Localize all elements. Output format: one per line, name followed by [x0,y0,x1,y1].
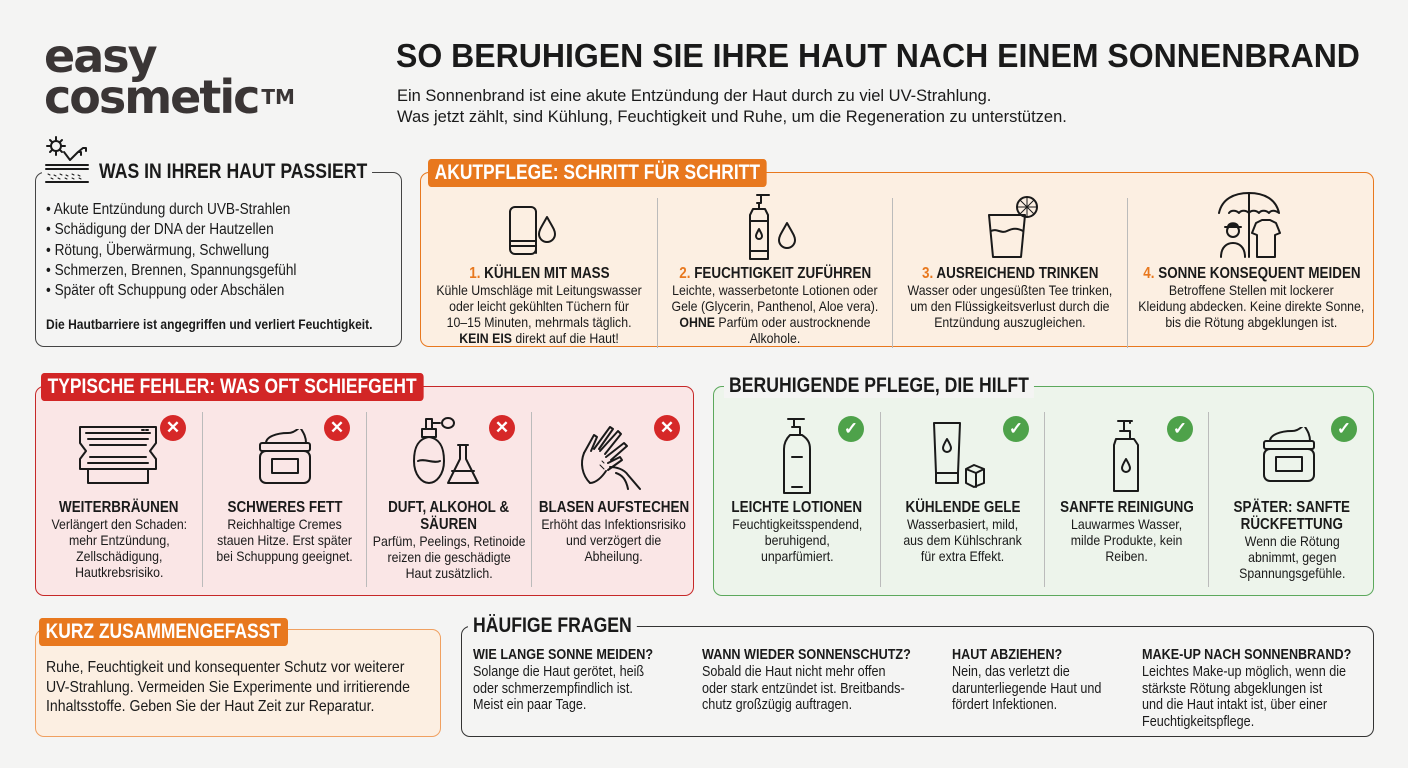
error 2 [216,499,353,564]
icon: umbrella person shirt [1218,192,1281,258]
product 2: aus dem Kühlschrank [903,532,1022,548]
step 3: Entzündung auszugleichen. [934,314,1086,330]
product 3: SANFTE REINIGUNG [1060,499,1193,516]
check mark [1003,416,1029,442]
summary text: Inhaltsstoffe. Geben Sie der Haut Zeit zur Reparatur. [46,698,374,715]
heading: BERUHIGENDE PFLEGE, DIE HILFT [729,374,1029,397]
bullet list: • Später oft Schuppung oder Abschälen [46,282,284,299]
summary text: Ruhe, Feuchtigkeit und konsequenter Schutz vor weiterer [46,659,404,676]
subtitle: Was jetzt zählt, sind Kühlung, Feuchtigkeit und Ruhe, um die Regeneration zu unterstützen. [397,108,1067,126]
error 2: stauen Hitze. Erst später [217,532,352,548]
icon: lotion bottle [783,418,811,494]
logo: easy [44,29,156,83]
icon: pump soap [1113,420,1139,492]
error 1 [51,498,187,580]
error 2: bei Schuppung geeignet. [216,548,353,564]
product 2 [903,498,1022,564]
error 4: und verzögert die [566,532,661,548]
product 4 [1234,498,1350,581]
error 4: Erhöht das Infektionsrisiko [541,516,686,532]
error 2: SCHWERES FETT [227,499,342,516]
faq 1: Meist ein paar Tage. [473,697,586,713]
tab: TYPISCHE FEHLER: WAS OFT SCHIEFGEHT [48,375,417,398]
product 4: RÜCKFETTUNG [1241,516,1343,533]
subtitle [397,87,1067,126]
icon: glass with lemon [988,196,1038,258]
heading: HÄUFIGE FRAGEN [473,614,632,637]
icon: gel tube & ice [933,422,985,488]
x mark [654,415,680,441]
step 2: 2. FEUCHTIGKEIT ZUFÜHREN [679,265,871,282]
step 1: oder leicht gekühlten Tüchern für [449,298,629,314]
faq 2: oder stark entzündet ist. Breitbands- [702,680,905,696]
step 1: Kühle Umschläge mit Leitungswasser [436,282,642,298]
faq 2: chutz großzügig auftragen. [702,697,852,713]
step 2: Leichte, wasserbetonte Lotionen oder [672,282,878,298]
faq 1: Solange die Haut gerötet, heiß [473,664,644,680]
x mark: ✕ [330,418,344,437]
step 4: Betroffene Stellen mit lockerer [1169,282,1334,298]
check mark [1331,416,1357,442]
faq 1: WIE LANGE SONNE MEIDEN? [473,647,653,663]
faq 4: MAKE-UP NACH SONNENBRAND? [1142,647,1351,663]
product 3 [1060,499,1193,564]
error 3 [373,499,525,581]
product 4: Spannungsgefühle. [1239,565,1345,581]
step 3: 3. AUSREICHEND TRINKEN [922,265,1098,282]
faq 4: Leichtes Make-up möglich, wenn die [1142,664,1346,680]
step 4 [1138,265,1365,330]
product 2: für extra Effekt. [921,548,1004,564]
product 4: abnimmt, gegen [1248,549,1336,565]
error 1: Zellschädigung, [76,548,162,564]
icon: tanning bed [79,426,157,484]
note: Die Hautbarriere ist angegriffen und verliert Feuchtigkeit. [46,316,372,332]
faq 2: WANN WIEDER SONNENSCHUTZ? [702,647,911,663]
faq 3: fördert Infektionen. [952,697,1057,713]
icon: cream jar [1263,427,1315,482]
error 3: Parfüm, Peelings, Retinoide [373,533,525,549]
summary text [46,659,410,715]
bullet list: • Schädigung der DNA der Hautzellen [46,221,274,238]
panel: kurz zusammengefasst [35,629,441,737]
icon: perfume & flask [413,417,479,484]
bullet list: • Akute Entzündung durch UVB-Strahlen [46,201,290,218]
heading: WAS IN IHRER HAUT PASSIERT [99,160,367,183]
x mark [489,415,515,441]
step 3: um den Flüssigkeitsverlust durch die [910,298,1110,314]
x mark: ✕ [495,418,509,437]
step 2: Alkohole. [750,330,800,346]
error 3: reizen die geschädigte [387,549,511,565]
faq 3: Nein, das verletzt die [952,664,1070,680]
panel: akutpflege [420,172,1374,347]
x mark: ✕ [166,418,180,437]
panel: häufige fragen [461,626,1374,737]
product 1: LEICHTE LOTIONEN [732,499,862,516]
icon: hands [581,426,641,490]
product 2: Wasserbasiert, mild, [907,516,1018,532]
step 4: Kleidung abdecken. Keine direkte Sonne, [1138,298,1365,314]
faq 3: darunterliegende Haut und [952,680,1101,696]
panel: beruhigende pflege [713,386,1374,596]
bullet list [46,201,296,299]
panel: was in ihrer haut passiert [35,172,402,347]
faq 3 [952,647,1101,713]
step 3: Wasser oder ungesüßten Tee trinken, [908,282,1112,298]
error 4 [538,499,689,564]
product 2: KÜHLENDE GELE [905,499,1020,516]
step 1: 1. KÜHLEN MIT MASS [469,265,609,282]
product 4: Wenn die Rötung [1245,533,1339,549]
product 1 [732,499,862,564]
title: SO BERUHIGEN SIE IHRE HAUT NACH EINEM SONNENBRAND [396,37,1360,74]
product 1: unparfümiert. [761,548,833,564]
step 2 [672,264,878,346]
faq 1: oder schmerzempfindlich ist. [473,680,633,696]
step 1: 10–15 Minuten, mehrmals täglich. [447,314,631,330]
icon: sun skin [42,136,94,188]
icon: towel and drop [509,206,556,255]
check mark: ✓ [1173,419,1187,438]
product 1: Feuchtigkeitsspendend, [732,516,862,532]
faq 4: stärkste Rötung abgeklungen ist [1142,680,1322,696]
faq 4: und die Haut intakt ist, über einer [1142,697,1327,713]
step 1 [436,264,642,346]
faq 1 [473,647,653,713]
product 1: beruhigend, [764,532,830,548]
icon: lotion bottle [749,194,796,260]
product 3: Lauwarmes Wasser, [1071,516,1182,532]
logo: cosmeticTM [44,70,295,124]
bullet list: • Rötung, Überwärmung, Schwellung [46,242,269,259]
product 3: milde Produkte, kein [1071,532,1182,548]
error 3: SÄUREN [421,516,477,533]
faq 2 [702,647,911,713]
panel: typische fehler [35,386,694,596]
x mark [160,415,186,441]
error 1: Hautkrebsrisiko. [75,564,163,580]
error 4: Abheilung. [584,548,643,564]
faq 4: Feuchtigkeitspflege. [1142,714,1254,730]
step 2: OHNE Parfüm oder austrocknende [679,314,871,330]
step 2: Gele (Glycerin, Panthenol, Aloe vera). [672,298,878,314]
check mark: ✓ [844,419,858,438]
faq 2: Sobald die Haut nicht mehr offen [702,664,886,680]
subtitle: Ein Sonnenbrand ist eine akute Entzündung der Haut durch zu viel UV-Strahlung. [397,87,991,105]
tab: AKUTPFLEGE: SCHRITT FÜR SCHRITT [435,161,760,184]
x mark: ✕ [660,418,674,437]
product 4: SPÄTER: SANFTE [1234,499,1350,516]
error 1: WEITERBRÄUNEN [59,499,179,516]
logo [44,29,295,124]
tab: KURZ ZUSAMMENGEFASST [46,620,281,643]
faq 3: HAUT ABZIEHEN? [952,647,1062,663]
check mark [1167,416,1193,442]
error 3: Haut zusätzlich. [406,565,492,581]
icon: cream jar [259,429,311,484]
check mark: ✓ [1009,419,1023,438]
product 3: Reiben. [1105,548,1148,564]
error 3: DUFT, ALKOHOL & [389,499,509,516]
summary text: UV-Strahlung. Vermeiden Sie Experimente und irritierende [46,678,410,696]
error 4: BLASEN AUFSTECHEN [538,499,689,516]
step 1: KEIN EIS direkt auf die Haut! [459,330,619,346]
step 4: bis die Rötung abgeklungen ist. [1166,314,1337,330]
check mark: ✓ [1337,419,1351,438]
error 2: Reichhaltige Cremes [227,516,342,532]
step 3 [908,265,1112,330]
bullet list: • Schmerzen, Brennen, Spannungsgefühl [46,262,296,279]
error 1: mehr Entzündung, [69,532,169,548]
step 4: 4. SONNE KONSEQUENT MEIDEN [1143,265,1360,282]
faq 4 [1142,647,1351,730]
check mark [838,416,864,442]
error 1: Verlängert den Schaden: [51,516,187,532]
x mark [324,415,350,441]
